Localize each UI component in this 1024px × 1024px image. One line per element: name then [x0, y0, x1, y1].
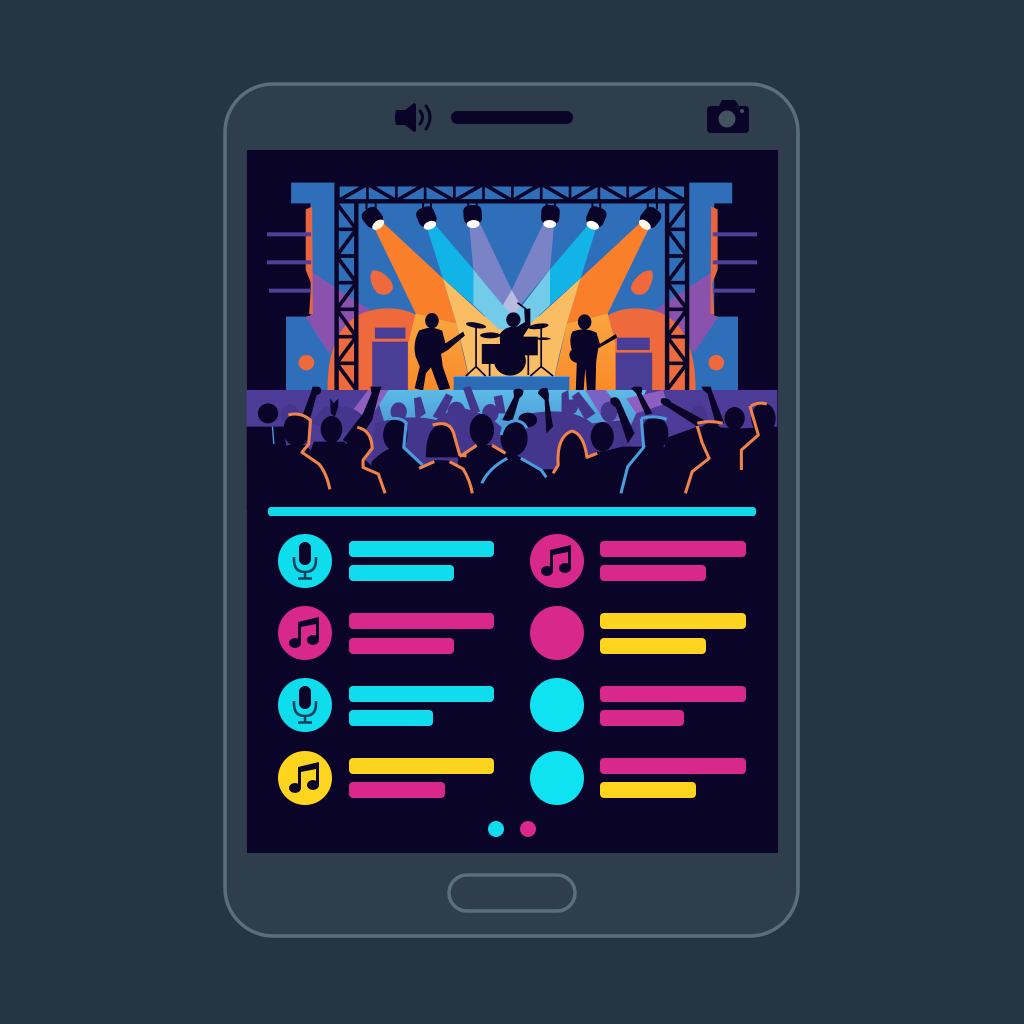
icon: music note [278, 751, 332, 805]
amplifier stacks [372, 328, 652, 392]
illustration: crowd [246, 386, 778, 510]
list item right 2 [530, 606, 746, 660]
raised hands [258, 386, 745, 444]
side rails [267, 232, 757, 293]
light beams [375, 224, 648, 391]
icon: speaker [395, 103, 430, 132]
drum kit and drummer [466, 303, 553, 376]
illustration: concert stage [267, 183, 757, 392]
orange decorative shapes [299, 271, 724, 391]
list item left 4 [278, 751, 494, 805]
truss left tower [337, 183, 356, 391]
spotlight 5 [586, 206, 606, 230]
orange rim light [288, 403, 767, 493]
pagination dots [488, 821, 536, 837]
divider bar [268, 507, 756, 516]
icon: camera [707, 100, 749, 133]
phone body [225, 84, 798, 936]
icon: music note [530, 534, 584, 588]
truss [335, 183, 689, 391]
list item left 3 [278, 678, 494, 732]
dark mass of audience [246, 427, 778, 511]
truss right tower [667, 183, 687, 391]
spotlight 6 [638, 206, 662, 230]
blue rim light [272, 417, 667, 493]
list item left 2 [278, 606, 494, 660]
spotlights [362, 204, 662, 230]
drum riser [454, 376, 569, 391]
dance floor band [246, 390, 778, 470]
stage backdrop [286, 183, 738, 391]
icon: music note [278, 606, 332, 660]
back row of crowd [281, 385, 707, 470]
front row of crowd [284, 404, 778, 470]
list item right 3 [530, 678, 746, 732]
list item right 4 [530, 751, 746, 805]
earpiece slot [451, 111, 573, 124]
home button [449, 875, 575, 911]
spotlight 1 [362, 206, 384, 230]
list item right 1 [530, 534, 746, 588]
list item left 1 [278, 534, 494, 588]
spotlight 2 [416, 206, 437, 230]
spotlight 4 [540, 204, 560, 229]
icon: microphone [278, 678, 332, 732]
guitarist left [415, 313, 465, 391]
truss top span [335, 184, 689, 201]
spotlight 3 [463, 204, 483, 229]
phone screen [247, 150, 778, 853]
icon: microphone [278, 534, 332, 588]
guitarist right [569, 314, 617, 391]
